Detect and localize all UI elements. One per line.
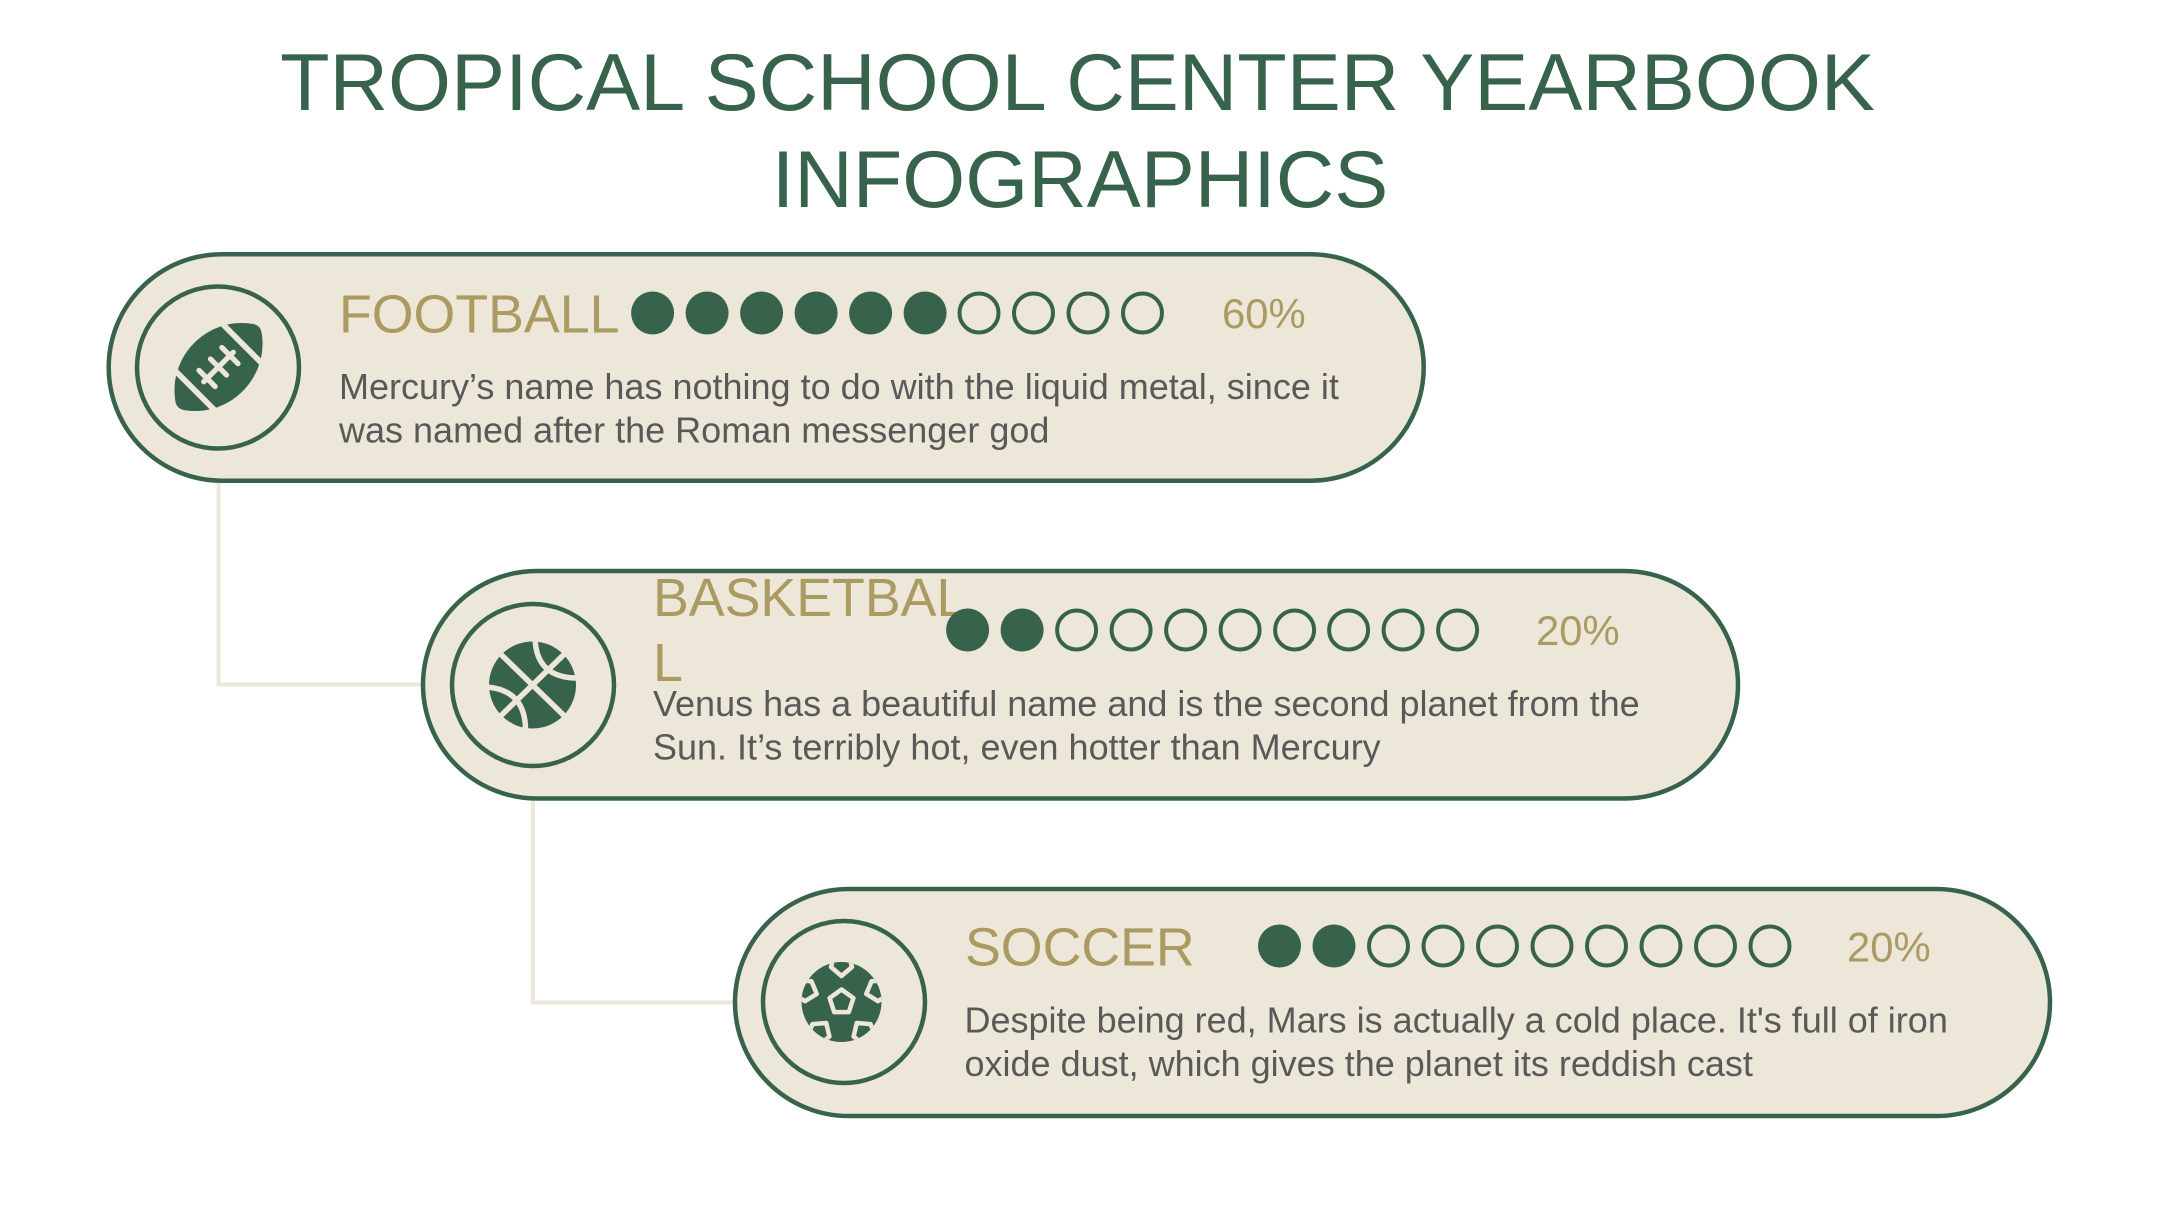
heading: L: [653, 633, 683, 693]
heading: FOOTBALL: [339, 284, 619, 344]
description: [653, 683, 1640, 768]
description: oxide dust, which gives the planet its reddish cast: [964, 1043, 1753, 1084]
panel: basketball: [423, 568, 1738, 798]
rating dots: 2 of 10: [946, 608, 1477, 652]
icon ring: [137, 286, 299, 448]
description: Despite being red, Mars is actually a cold place. It's full of iron: [964, 1000, 1948, 1040]
heading: SOCCER: [965, 918, 1195, 978]
icon: football: [150, 298, 287, 436]
heading: BASKETBAL: [653, 568, 966, 628]
connector: football to basketball: [218, 480, 425, 684]
rating dots: 2 of 10: [1258, 924, 1790, 968]
percentage: 20%: [1847, 924, 1931, 970]
percentage: 20%: [1536, 607, 1620, 654]
title: INFOGRAPHICS: [772, 135, 1388, 225]
rating dots: 6 of 10: [631, 292, 1162, 334]
icon: soccer ball: [802, 962, 882, 1042]
icon ring: [452, 604, 614, 766]
title: [280, 38, 1875, 225]
description: Mercury’s name has nothing to do with the liquid metal, since it: [339, 366, 1339, 407]
icon: basketball: [486, 639, 578, 730]
panel background: [109, 254, 1424, 481]
description: was named after the Roman messenger god: [338, 410, 1049, 450]
heading: [653, 568, 966, 693]
description: Sun. It’s terribly hot, even hotter than Mercury: [653, 726, 1381, 768]
connector: basketball to soccer: [533, 800, 737, 1002]
title: TROPICAL SCHOOL CENTER YEARBOOK: [280, 38, 1875, 128]
icon ring: [763, 921, 925, 1083]
panel background: [735, 889, 2050, 1116]
description: [964, 1000, 1948, 1084]
percentage: 60%: [1222, 290, 1306, 337]
description: Venus has a beautiful name and is the second planet from the: [653, 683, 1640, 724]
panel background: [423, 571, 1738, 798]
panel: football: [109, 254, 1424, 481]
description: [338, 366, 1339, 450]
panel: soccer: [735, 889, 2050, 1116]
